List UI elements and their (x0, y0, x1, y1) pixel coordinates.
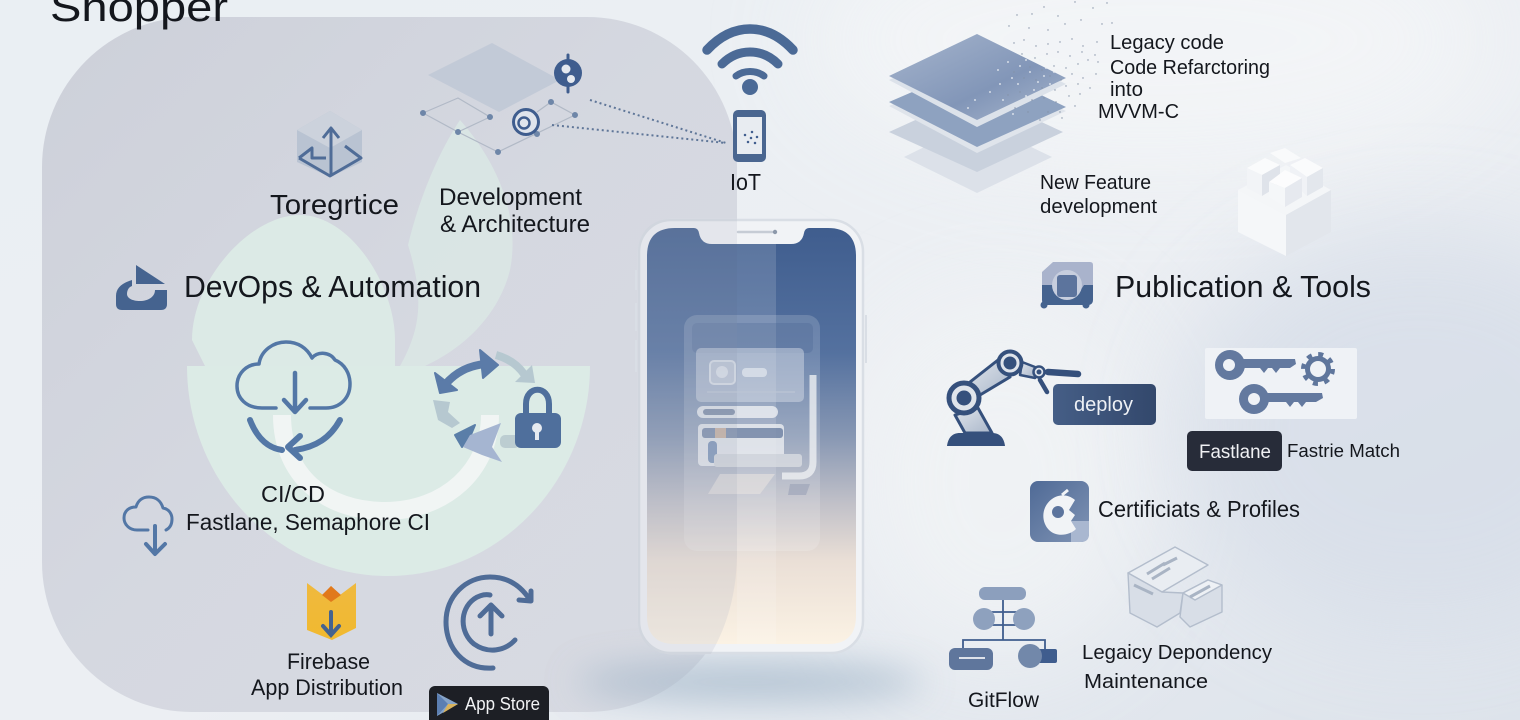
icon: IoT phone (733, 110, 766, 162)
icon: architecture layers (423, 43, 582, 152)
icon: devops (116, 265, 167, 310)
label: legacy dependency maintenance: Legaicy Depondency (1082, 641, 1273, 664)
particles (1008, 2, 1112, 120)
label: legacy code refactoring (1098, 31, 1270, 123)
icon: wifi (707, 29, 793, 95)
heading: DevOps and Automation: DevOps & Automation (184, 269, 481, 304)
badge: App Store: App Store (465, 694, 540, 714)
white arc (282, 415, 490, 511)
label: Fastlane, Semaphore CI: Fastlane, Semaphore CI (186, 509, 430, 535)
label: new feature development: development (1040, 196, 1157, 218)
icon: white blocks (1238, 148, 1331, 256)
icon: robot arm (947, 352, 1078, 446)
label: development and architecture: Development (439, 184, 582, 211)
label: development and architecture: & Architecture (440, 211, 590, 238)
panel: rounded backdrop (42, 17, 737, 712)
label: legacy code refactoring: Legacy code (1110, 31, 1224, 54)
icon: layer stack (889, 2, 1112, 193)
icon: gitflow (949, 587, 1057, 670)
label: new feature development: New Feature (1040, 172, 1151, 194)
label: firebase app distribution: Firebase (287, 649, 370, 674)
icon: sync arrows with lock (433, 350, 561, 462)
icon: certificates tile (1030, 481, 1089, 542)
button: Fastlane (1187, 431, 1282, 471)
label: CI/CD: CI/CD (261, 481, 325, 507)
icon: CI/CD cloud (237, 342, 350, 458)
label: certificates and profiles: Certificiats & Profiles (1098, 496, 1300, 522)
label: legacy code refactoring: MVVM-C (1098, 100, 1179, 123)
label: legacy code refactoring: Code Refarctoring (1110, 56, 1270, 79)
icon: keys and gear panel (1205, 348, 1357, 419)
green swoosh (187, 120, 590, 576)
icon: firebase (307, 583, 356, 640)
phone (636, 220, 866, 653)
label: firebase app distribution: App Distribution (251, 675, 403, 700)
icon: upload rotation (446, 577, 531, 668)
phone app card (684, 315, 820, 551)
label: legacy dependency maintenance (1082, 641, 1273, 693)
panel lower corner over phone (640, 221, 737, 652)
icon: small cloud (124, 497, 172, 554)
label: Fastrie Match: Fastrie Match (1287, 441, 1400, 461)
label: Toregrtice: Toregrtice (270, 189, 399, 220)
label: legacy dependency maintenance: Maintenance (1084, 670, 1208, 693)
label: GitFlow: GitFlow (968, 689, 1040, 712)
icon: dependency box (1128, 547, 1222, 627)
button: deploy (1053, 384, 1156, 425)
label: IoT: IoT (730, 169, 761, 195)
label: development and architecture (439, 184, 590, 238)
button: deploy: deploy (1074, 394, 1133, 416)
floor shadow under phone (575, 664, 925, 700)
icon: publication tools (1040, 262, 1093, 308)
dotted connectors (552, 100, 726, 143)
button: Fastlane: Fastlane (1199, 441, 1271, 463)
badge: App Store (429, 686, 549, 720)
icon: cube with arrow (297, 111, 362, 177)
label: new feature development (1040, 172, 1157, 218)
label: legacy code refactoring: into (1110, 78, 1143, 101)
label: firebase app distribution (251, 649, 403, 700)
heading: Publication and Tools: Publication & Tools (1115, 269, 1371, 304)
